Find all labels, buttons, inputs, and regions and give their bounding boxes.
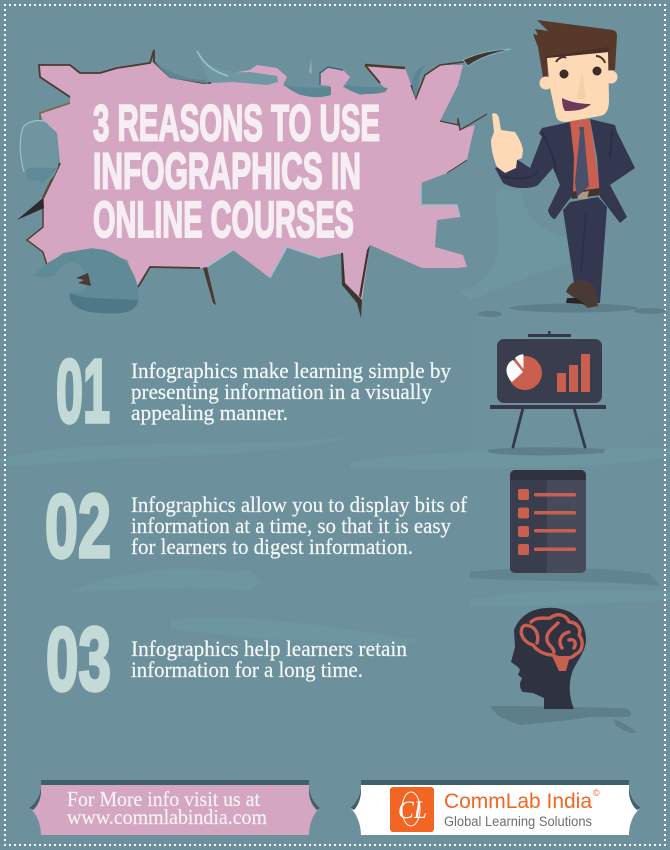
shoe <box>566 280 598 308</box>
logo text: Global Learning Solutions <box>444 814 592 829</box>
reason 2 text: information at a time, so that it is easy <box>131 513 451 538</box>
tie <box>575 127 589 197</box>
nose <box>577 70 586 99</box>
legs <box>563 197 607 303</box>
torn folds <box>20 51 425 314</box>
hair <box>533 20 617 77</box>
icon: head with brain <box>490 608 636 733</box>
bar chart <box>557 354 590 392</box>
hand <box>491 113 523 173</box>
jacket <box>495 119 635 223</box>
logo text: CommLab India <box>444 790 592 813</box>
number 03: 03 <box>46 610 111 710</box>
ears <box>540 76 552 90</box>
torn pink paper <box>27 62 475 300</box>
title: 3 REASONS TO USE <box>93 94 380 152</box>
logo mark <box>390 787 434 832</box>
reason 2 text <box>131 492 468 559</box>
shirt <box>570 119 600 194</box>
icon: presentation board <box>487 331 606 455</box>
reason 3 text <box>131 636 407 682</box>
reason 1 text: appealing manner. <box>131 400 288 425</box>
icon: checklist <box>470 470 660 586</box>
panel: torn paper hero <box>17 49 511 318</box>
brain <box>521 615 582 659</box>
logo mark: CL <box>398 797 427 824</box>
reason 1 text: Infographics make learning simple by <box>131 358 451 383</box>
reason 3 text: Infographics help learners retain <box>131 636 407 661</box>
torn edges <box>17 49 511 318</box>
footer text <box>67 787 267 829</box>
footer text: For More info visit us at <box>67 787 260 811</box>
face <box>547 52 609 122</box>
number 01: 01 <box>56 342 110 442</box>
reason 2 text: for learners to digest information. <box>131 534 413 559</box>
belt <box>570 188 601 199</box>
footer text: www.commlabindia.com <box>67 805 267 829</box>
logo text <box>444 788 600 829</box>
footer banner: CommLab India logo <box>350 780 641 835</box>
reason 2 text: Infographics allow you to display bits of <box>131 492 468 517</box>
mouth <box>562 98 591 111</box>
illustration: businessman thumbs up <box>478 20 666 317</box>
ground shadow <box>478 304 666 317</box>
pie chart <box>506 354 542 390</box>
reason 1 text: presenting information in a visually <box>131 379 432 404</box>
eyes <box>560 66 602 78</box>
number 02: 02 <box>45 477 111 577</box>
reason 1 text <box>131 358 451 425</box>
title <box>93 94 380 248</box>
title: ONLINE COURSES <box>93 191 354 248</box>
reason 3 text: information for a long time. <box>131 657 363 682</box>
title: INFOGRAPHICS IN <box>93 142 361 200</box>
footer banner: website <box>29 780 320 835</box>
eyebrows <box>556 56 605 63</box>
logo text: © <box>593 788 600 798</box>
